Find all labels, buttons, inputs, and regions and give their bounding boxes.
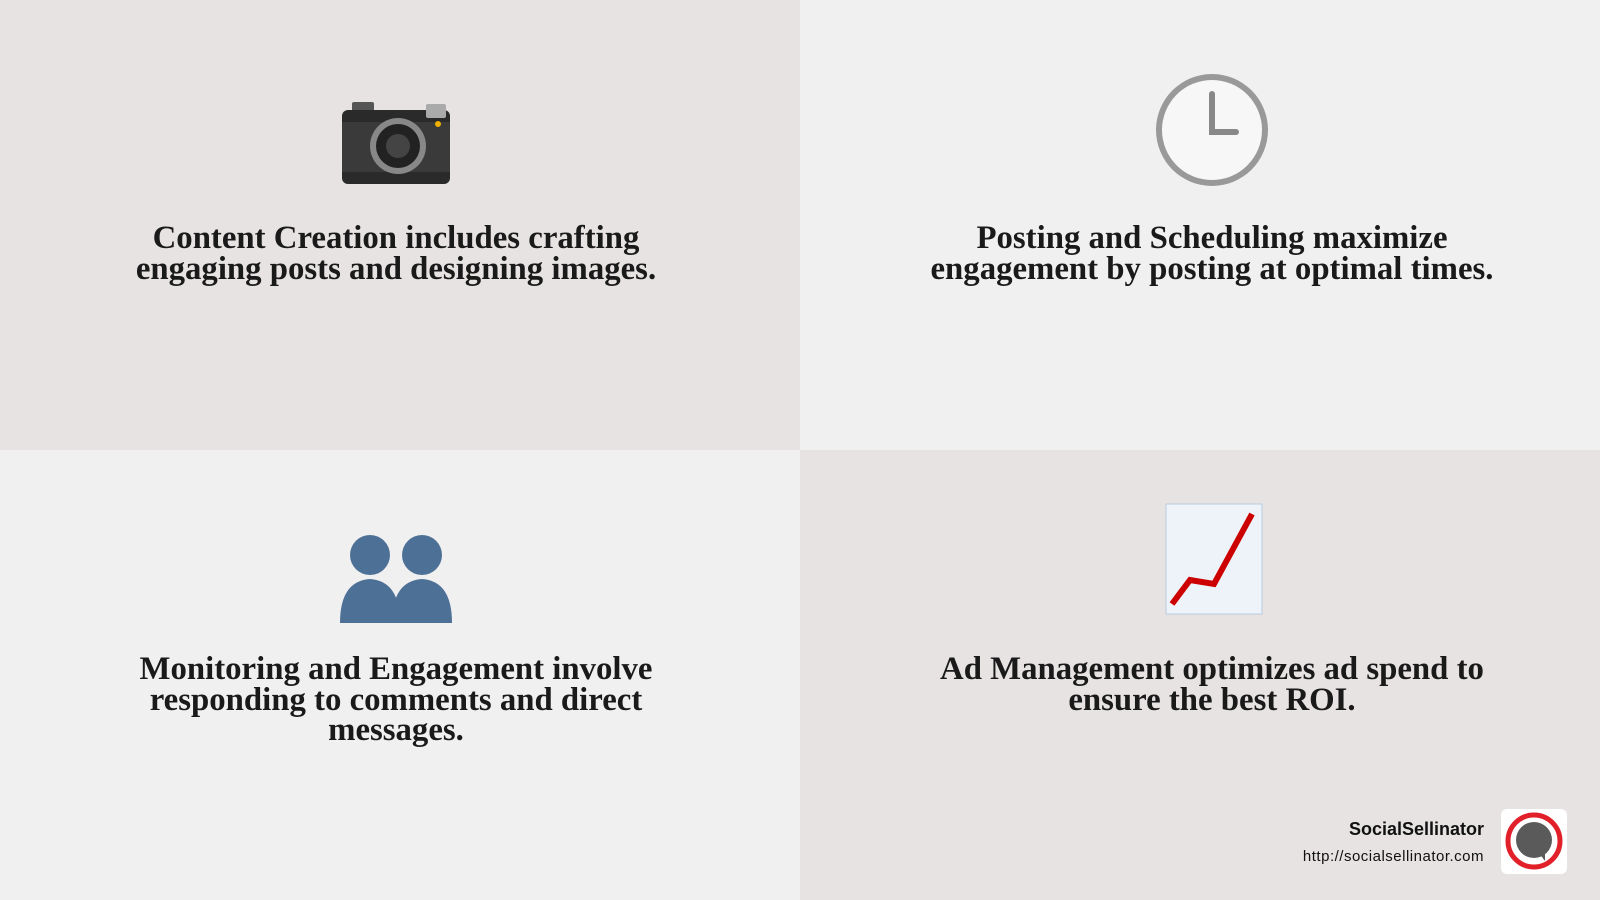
brand text [1303, 819, 1484, 865]
text: content creation: engaging posts and designing images. [136, 250, 656, 286]
text: posting: engagement by posting at optimal times. [930, 250, 1494, 286]
panel: content creation [0, 0, 800, 450]
brand text: SocialSellinator [1349, 819, 1484, 839]
panel: posting and scheduling [800, 0, 1600, 450]
text: ad management [940, 651, 1484, 718]
icon: people [340, 535, 452, 623]
text: monitoring: messages. [328, 712, 464, 748]
text: monitoring [140, 651, 652, 748]
text: ad management: Ad Management optimizes ad spend to [940, 651, 1484, 687]
text: ad management: ensure the best ROI. [1068, 682, 1356, 718]
text: monitoring: responding to comments and direct [150, 682, 642, 718]
text: monitoring: Monitoring and Engagement involve [140, 651, 652, 687]
text: content creation: Content Creation includes crafting [153, 220, 639, 256]
icon: clock [1156, 74, 1268, 186]
panel: ad management [800, 450, 1600, 900]
brand text: http://socialsellinator.com [1303, 848, 1484, 865]
text: content creation [136, 220, 656, 286]
text: posting: Posting and Scheduling maximize [976, 220, 1448, 256]
text: posting [930, 220, 1494, 286]
icon: camera [342, 102, 450, 184]
logo [1501, 809, 1567, 874]
panel: monitoring [0, 450, 800, 900]
icon: chart [1166, 504, 1262, 614]
